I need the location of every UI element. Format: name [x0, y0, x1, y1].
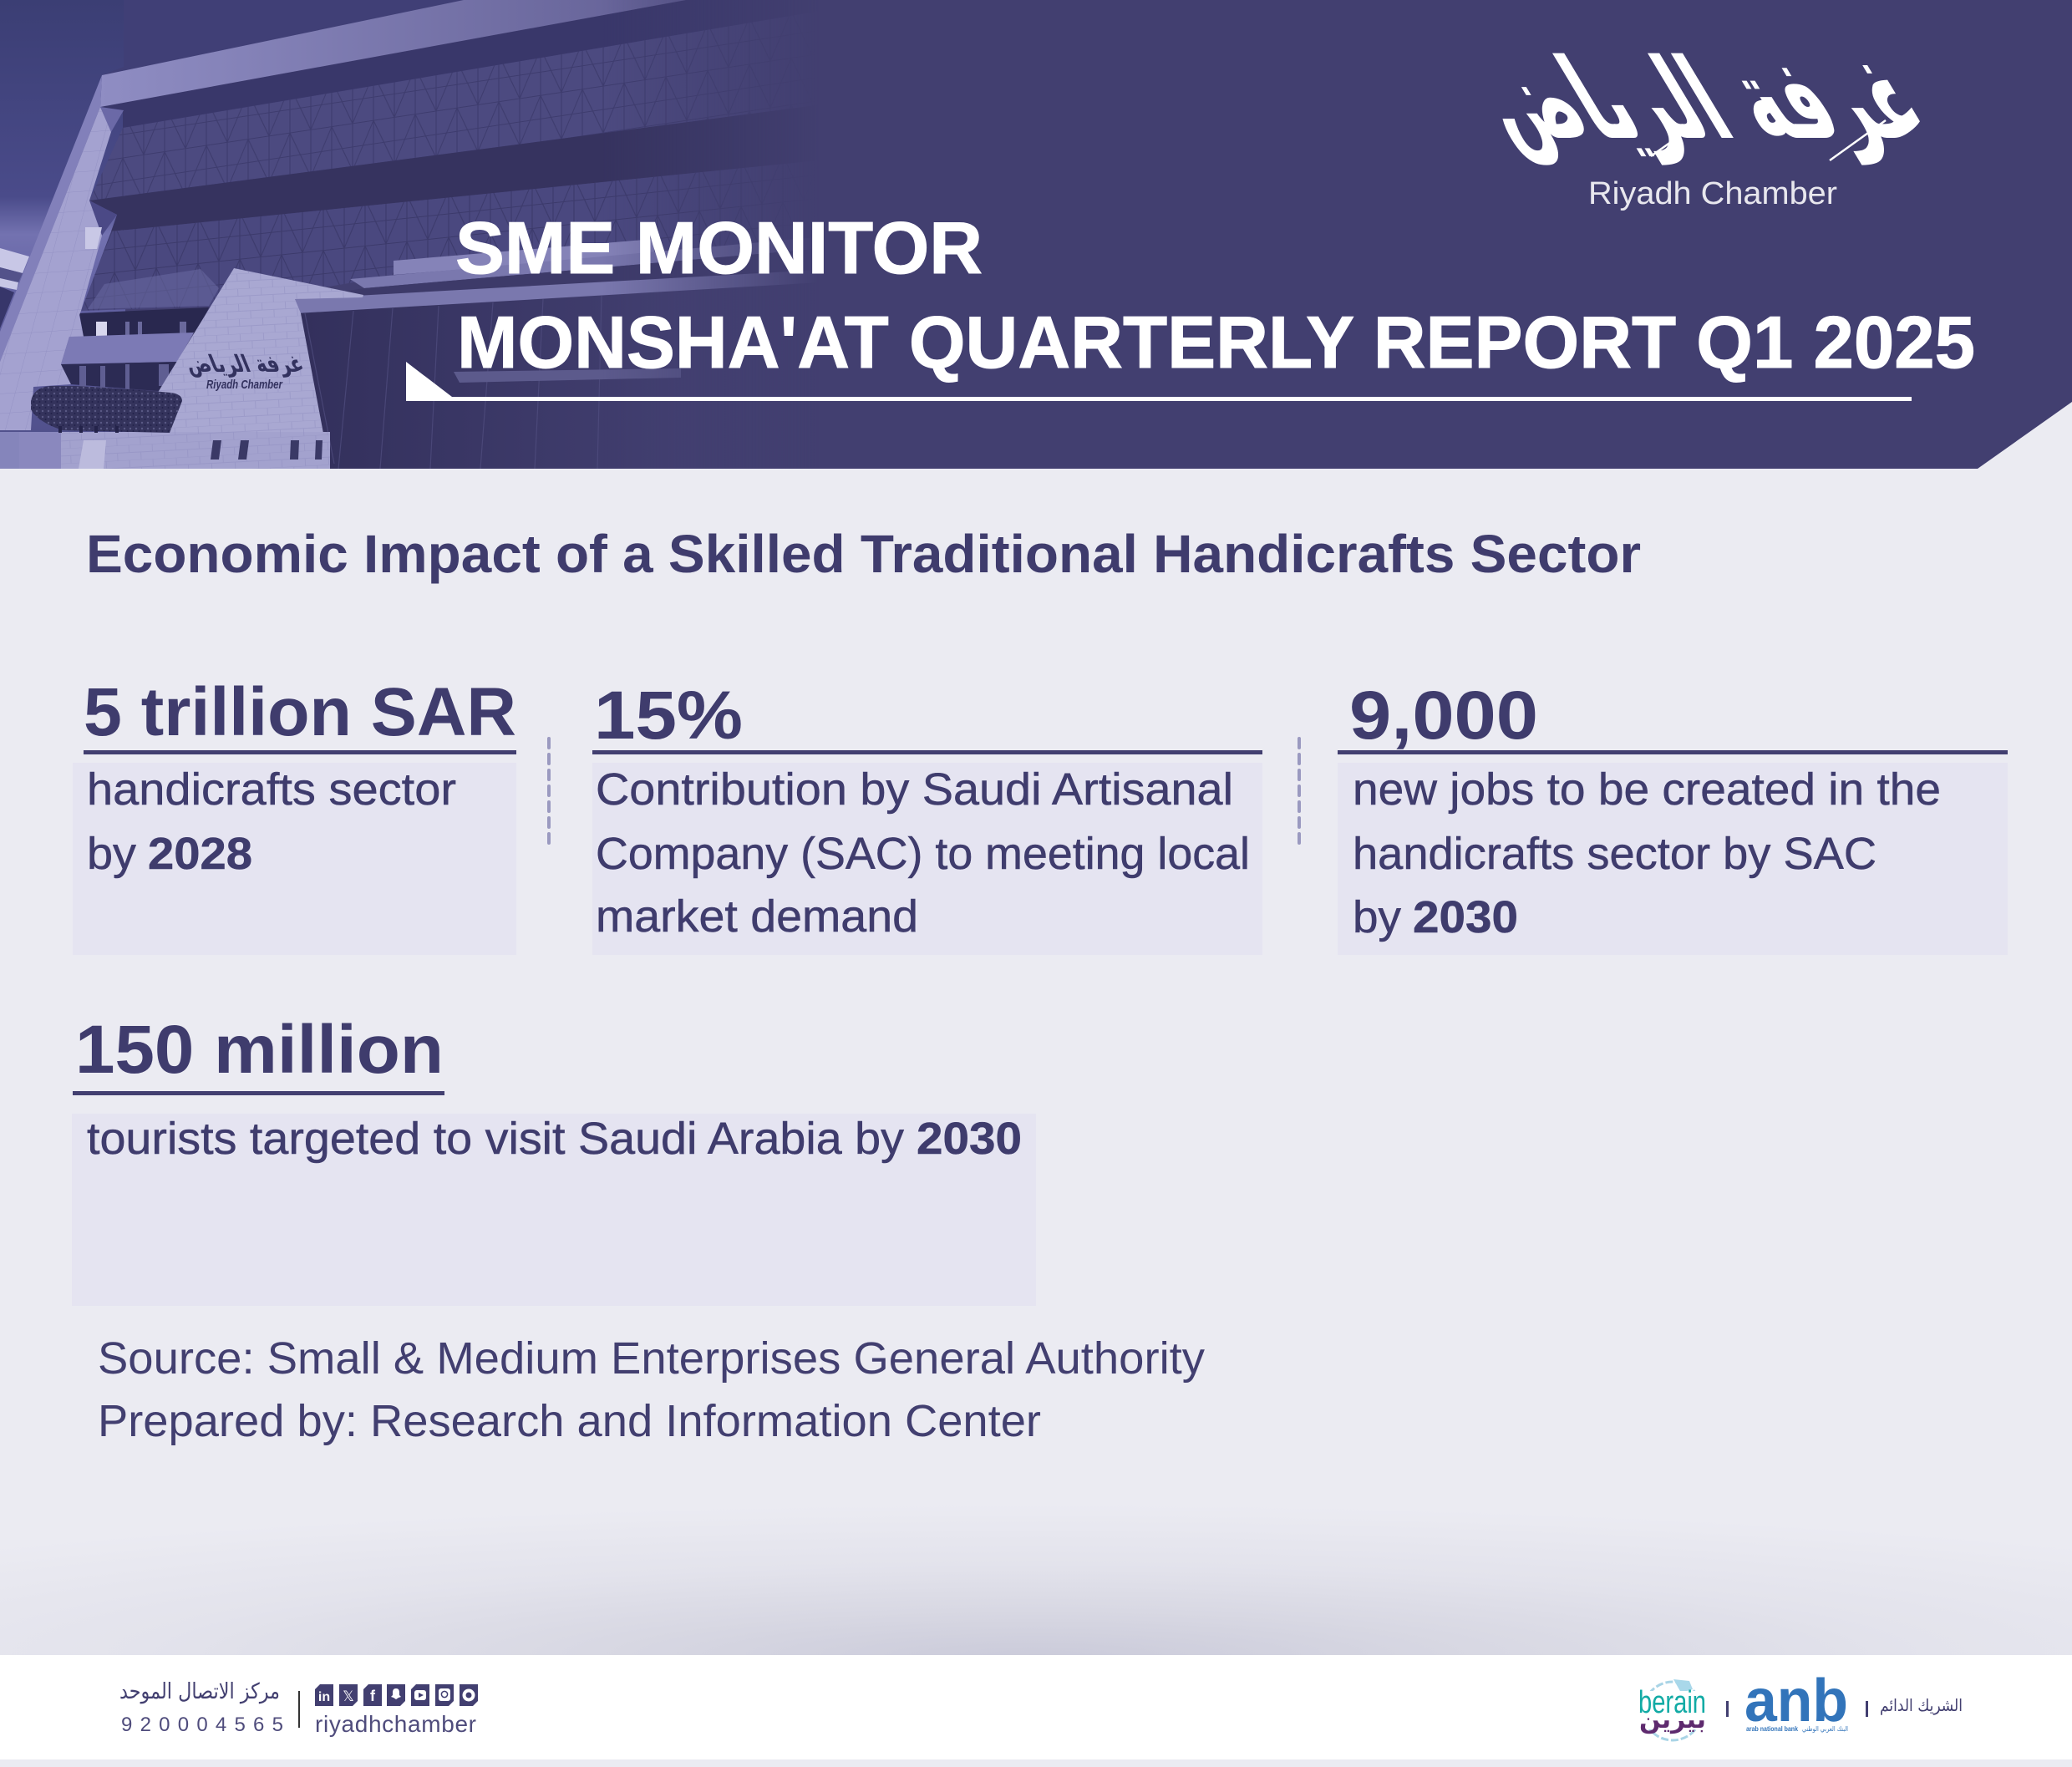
monument sign english: Riyadh Chamber	[206, 378, 283, 392]
column side face	[0, 75, 102, 362]
phone number: 920004565	[121, 1714, 283, 1736]
stone monument	[159, 268, 363, 432]
divider	[1298, 739, 1301, 844]
header banner	[0, 0, 2072, 469]
icon: snapchat	[387, 1684, 405, 1706]
icon: facebook	[363, 1684, 382, 1706]
card body box	[72, 1114, 1036, 1306]
description: 2030	[917, 1114, 1022, 1164]
value underline	[84, 750, 516, 754]
description: 2030	[1413, 892, 1518, 942]
title line 2: MONSHA'AT QUARTERLY REPORT Q1 2025	[457, 301, 1975, 383]
anb logo: anb	[1744, 1668, 1848, 1734]
value underline	[1338, 750, 2008, 754]
bottom soft shadow	[0, 1504, 2072, 1656]
partner separator	[1866, 1701, 1868, 1717]
title	[455, 206, 1975, 383]
under balcony windows	[61, 362, 177, 391]
low stone base	[61, 432, 330, 469]
icon: youtube	[411, 1684, 429, 1706]
stat value: 150 million	[75, 1012, 444, 1088]
base windows	[211, 440, 221, 460]
canopy band	[295, 272, 792, 313]
riyadh chamber logo arabic wordmark: غرفة الرياض	[1445, 35, 1953, 165]
berain logo: بيرين	[1639, 1705, 1706, 1734]
footer	[0, 1655, 2072, 1759]
icon: linkedin	[315, 1684, 333, 1706]
source note: Prepared by: Research and Information Center	[98, 1396, 1041, 1446]
upper roof steps	[394, 239, 654, 275]
building photograph	[0, 0, 835, 469]
description: by	[87, 829, 136, 879]
title line 1: SME MONITOR	[455, 206, 983, 289]
anb logo: البنك العربي الوطني	[1802, 1725, 1848, 1733]
card body box	[73, 763, 516, 955]
far-left ground	[0, 432, 19, 469]
roof band	[100, 0, 686, 107]
left column front	[0, 107, 111, 430]
description	[1353, 764, 1941, 942]
permanent partner label: الشريك الدائم	[1880, 1695, 1963, 1715]
glass reflections	[88, 269, 219, 309]
partner separator	[1726, 1701, 1729, 1717]
footer separator	[298, 1691, 300, 1728]
card body box	[1338, 763, 2008, 955]
description: Contribution by Saudi Artisanal	[596, 764, 1233, 815]
monument sign arabic: غرفة الرياض	[180, 350, 308, 378]
description: 2028	[148, 829, 252, 879]
distant building	[0, 248, 29, 273]
contact centre arabic label: مركز الاتصال الموحد	[119, 1679, 280, 1704]
source note: Source: Small & Medium Enterprises General Authority	[98, 1333, 1205, 1384]
description: by	[1353, 892, 1401, 942]
sunshade under canopy	[454, 368, 681, 383]
value underline	[73, 1091, 444, 1095]
dark lower storey	[79, 307, 209, 337]
icon: whatsapp	[460, 1684, 478, 1706]
anb logo: arab national bank	[1746, 1725, 1798, 1733]
balcony band	[61, 333, 194, 364]
description	[596, 764, 1250, 942]
description: Company (SAC) to meeting local	[596, 829, 1250, 879]
title underline with corner triangle	[406, 362, 1912, 401]
bush	[31, 386, 182, 433]
value underline	[592, 750, 1262, 754]
icon: instagram	[435, 1684, 454, 1706]
canopy dark glazing	[301, 300, 530, 469]
social handle: riyadhchamber	[315, 1711, 476, 1737]
roof return triangle	[100, 107, 124, 132]
stat value: 5 trillion SAR	[84, 674, 516, 750]
social icons	[315, 1684, 478, 1706]
stat value: 15%	[594, 678, 743, 754]
dark band between floors	[90, 119, 719, 231]
stat card: 9,000	[1338, 678, 2008, 955]
description: tourists targeted to visit Saudi Arabia by	[87, 1114, 904, 1164]
riyadh chamber logo english: Riyadh Chamber	[1588, 176, 1837, 211]
description: handicrafts sector by SAC	[1353, 829, 1876, 879]
icon: linkedin: in	[318, 1690, 330, 1704]
stat value: 9,000	[1349, 678, 1538, 754]
description	[87, 764, 456, 879]
stat card: 15%	[592, 678, 1262, 955]
icon: x	[339, 1684, 358, 1706]
column underside	[89, 201, 117, 236]
icon: facebook: f	[370, 1688, 376, 1704]
stat card: 5 trillion SAR	[73, 674, 516, 955]
header background shape	[0, 0, 2072, 469]
description: new jobs to be created in the	[1353, 764, 1941, 815]
sky	[0, 0, 125, 469]
icon: x: 𝕏	[343, 1688, 354, 1704]
berain logo	[1633, 1679, 1713, 1740]
footer white bar	[0, 1655, 2072, 1759]
glass lower band	[81, 172, 708, 311]
divider	[547, 739, 551, 844]
card body box	[592, 763, 1262, 955]
source note	[98, 1333, 1205, 1446]
stat card: 150 million	[72, 1012, 1036, 1306]
dark shadow under roof	[100, 0, 835, 128]
glass upper band	[90, 25, 739, 201]
section heading: Economic Impact of a Skilled Traditional Handicrafts Sector	[86, 524, 1641, 584]
description: market demand	[596, 891, 918, 942]
berain logo: berain	[1638, 1685, 1706, 1720]
description: handicrafts sector	[87, 764, 456, 815]
